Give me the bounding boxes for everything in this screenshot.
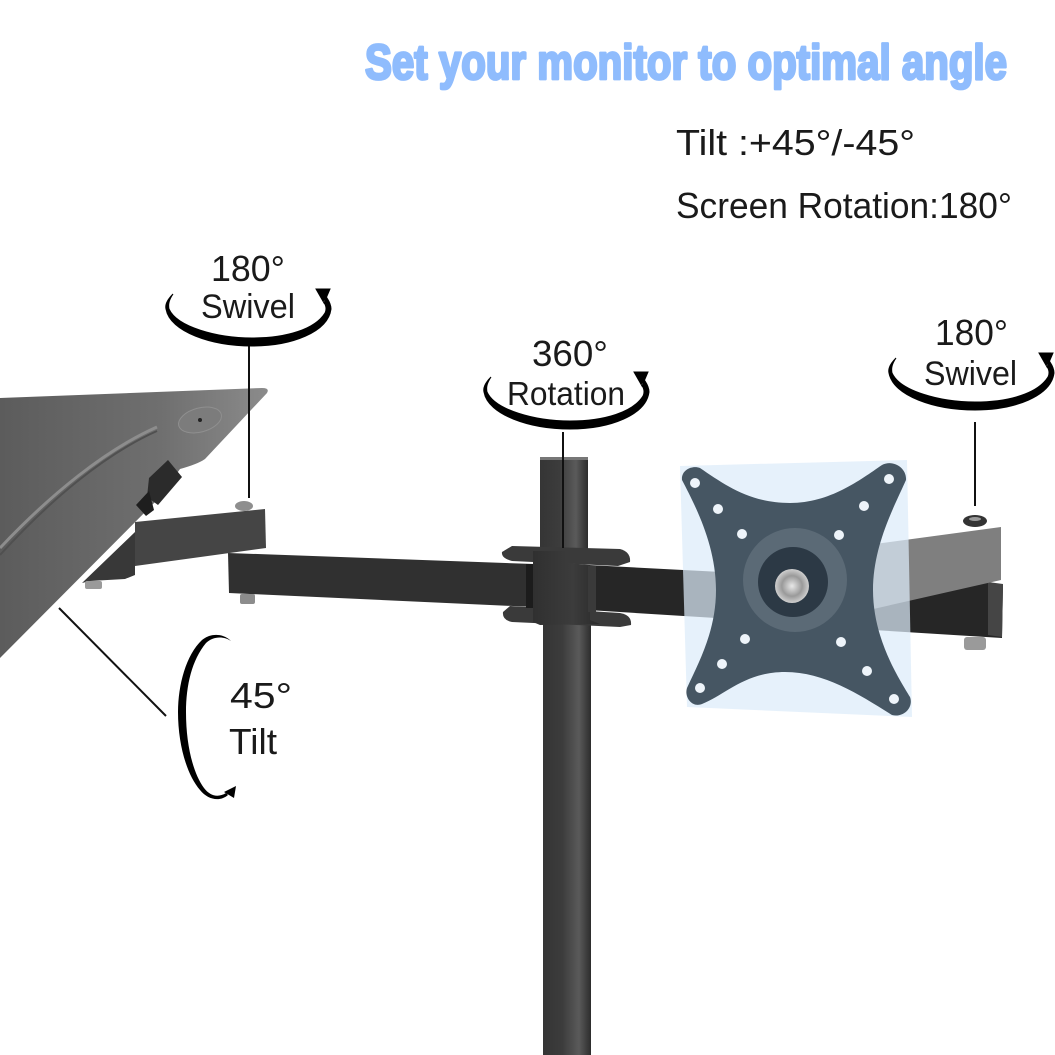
VESA mount plate — [682, 463, 911, 716]
arrow: right swivel — [889, 353, 1054, 410]
callout: left swivel — [166, 248, 331, 346]
callout: left swivel: 180° — [211, 248, 285, 289]
leader line: right swivel — [974, 422, 976, 506]
spec: tilt range: Tilt :+45°/-45° — [676, 122, 915, 163]
callout: tilt: 45° — [230, 675, 292, 716]
callout: rotation: 360° — [532, 333, 608, 374]
callout: right swivel — [889, 312, 1054, 410]
upper swivel arm — [82, 501, 266, 589]
right arm — [588, 515, 1003, 650]
callout: tilt — [178, 635, 292, 799]
leader line: left swivel — [248, 345, 250, 498]
callout: left swivel: Swivel — [201, 288, 295, 326]
callout: right swivel: Swivel — [924, 355, 1017, 393]
arrow: tilt — [178, 635, 236, 799]
callout: tilt: Tilt — [229, 721, 277, 762]
post clamp — [502, 546, 631, 627]
arrow: left swivel — [166, 289, 331, 346]
monitor stand post — [540, 457, 591, 1055]
callout: rotation: Rotation — [507, 375, 625, 412]
translucent VESA panel — [680, 460, 912, 717]
arrow: rotation — [484, 372, 649, 429]
leader line: rotation — [562, 432, 564, 548]
leader line: tilt — [59, 608, 166, 716]
left arm — [228, 553, 534, 607]
callout: right swivel: 180° — [935, 312, 1008, 353]
callout: rotation — [484, 333, 649, 429]
tablet tray plate — [0, 388, 268, 658]
spec: screen rotation: Screen Rotation:180° — [676, 185, 1012, 226]
